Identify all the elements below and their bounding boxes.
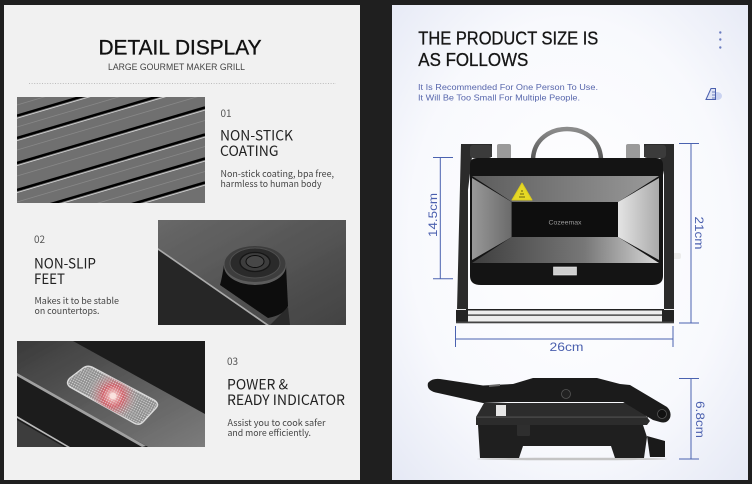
dimension: 26cm xyxy=(456,326,673,354)
hinge tabs xyxy=(457,144,674,310)
feature 01 text: Non-stick coating, bpa free, xyxy=(220,167,334,180)
lid and handle xyxy=(428,378,671,422)
white latch xyxy=(496,405,506,416)
panel: product size xyxy=(392,5,748,480)
heading: product size: AS FOLLOWS xyxy=(418,50,528,70)
grill: side view xyxy=(428,378,671,460)
dimension: 6.8cm xyxy=(679,378,707,459)
feature 01 text: COATING xyxy=(220,140,278,161)
lid xyxy=(470,158,663,285)
photo: non-slip foot xyxy=(158,220,346,325)
pivot screws xyxy=(562,390,666,418)
feature 03 text xyxy=(227,353,345,439)
feature 03 text: and more efficiently. xyxy=(228,426,311,439)
recommendation note xyxy=(418,82,598,103)
rear leg xyxy=(647,436,665,457)
dimension: 6.8cm: 6.8cm xyxy=(693,401,707,438)
feature 02 text: FEET xyxy=(34,268,65,289)
icon: ruler xyxy=(706,88,722,100)
dimension: 14.5cm xyxy=(426,158,453,279)
carry handle xyxy=(533,129,601,159)
feature 02 text xyxy=(34,231,119,317)
feature 03 text: POWER & xyxy=(227,374,288,395)
base xyxy=(478,425,647,458)
front button xyxy=(554,267,576,275)
feature 01 text: NON-STICK xyxy=(220,124,294,146)
feature 02 text: Makes it to be stable xyxy=(34,294,119,307)
feature 02 text: NON-SLIP xyxy=(34,253,96,274)
indicator lens xyxy=(68,366,158,424)
subtitle: LARGE GOURMET MAKER GRILL xyxy=(108,62,245,73)
recommendation note: It Is Recommended For One Person To Use. xyxy=(418,82,598,92)
photo: power indicator xyxy=(17,341,205,447)
feature 03 text: Assist you to cook safer xyxy=(228,416,326,429)
feature 03 text: 03 xyxy=(227,353,238,368)
dimension: 26cm: 26cm xyxy=(550,340,584,354)
feature 03 text: READY INDICATOR xyxy=(227,389,345,410)
photo: grill plate grooves xyxy=(17,97,205,203)
recommendation note: It Will Be Too Small For Multiple People. xyxy=(418,93,580,103)
feature 02 text: on countertops. xyxy=(34,304,100,317)
panel: detail display xyxy=(4,5,360,480)
feature 01 text xyxy=(220,105,334,190)
dimension: 21cm xyxy=(679,144,706,323)
feature 01 text: harmless to human body xyxy=(220,177,322,190)
feature 01 text: 01 xyxy=(220,105,232,120)
icon: three dots xyxy=(719,31,722,49)
warning triangle xyxy=(512,183,532,200)
brand label: Cozeemax xyxy=(548,220,582,226)
frame legs and front bar xyxy=(456,309,674,323)
middle plate xyxy=(476,403,650,425)
dimension: 21cm: 21cm xyxy=(692,216,706,250)
heading: product size xyxy=(418,28,598,70)
grill: front view xyxy=(456,129,681,323)
heading: product size: THE PRODUCT SIZE IS xyxy=(418,28,598,48)
dimension: 14.5cm: 14.5cm xyxy=(426,193,440,237)
title: detail display: DETAIL DISPLAY xyxy=(98,36,262,60)
feature 02 text: 02 xyxy=(34,231,46,246)
